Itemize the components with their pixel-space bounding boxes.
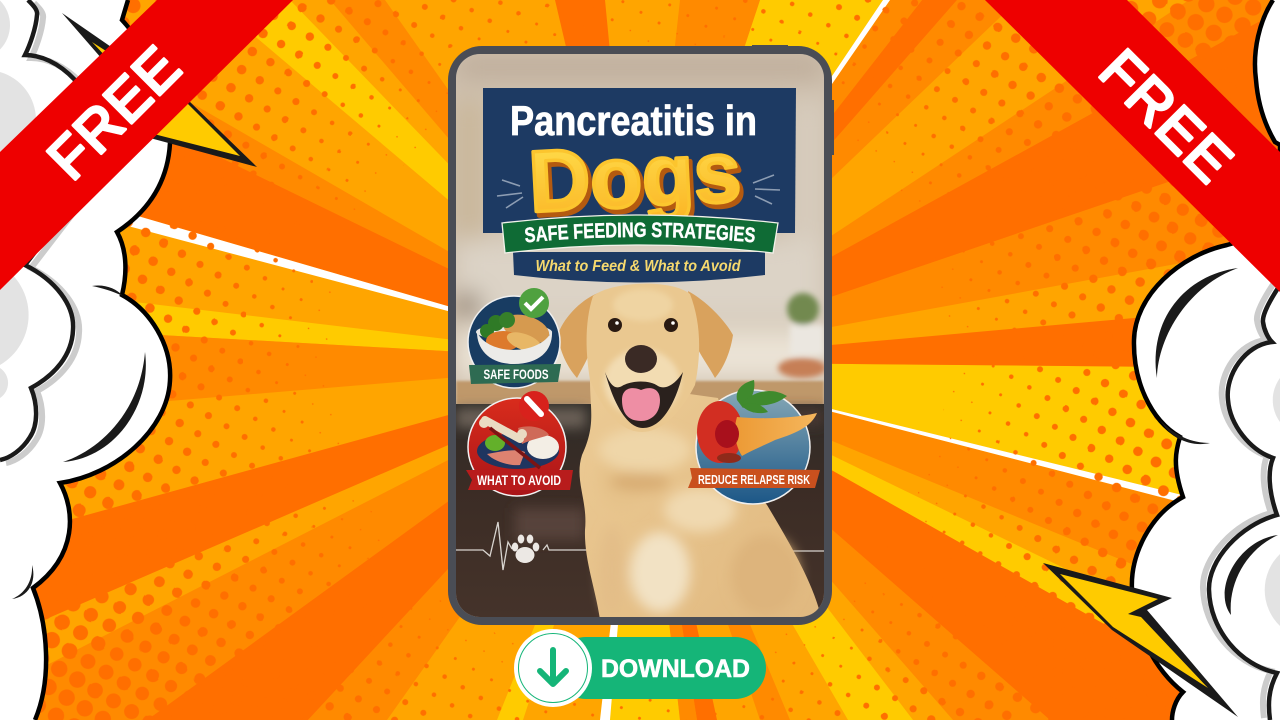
panel: what to avoid	[466, 391, 573, 496]
icon: pancreas	[697, 401, 817, 463]
download button: DOWNLOAD	[601, 655, 750, 683]
panel: safe foods: SAFE FOODS	[484, 367, 548, 382]
title word: Dogs	[531, 148, 744, 218]
title word: Dogs: Dogs	[526, 123, 743, 231]
dog illustration	[558, 284, 822, 620]
ribbon: free right: FREE	[1087, 37, 1245, 195]
icon: no entry badge	[519, 391, 549, 421]
icon: leaves	[737, 380, 787, 413]
ribbon: free left	[0, 0, 293, 290]
ribbon: free right	[985, 0, 1280, 292]
sub banner: What to Feed & What to Avoid	[536, 258, 742, 275]
icon: paw print	[512, 534, 539, 563]
decorative sparks	[497, 175, 780, 208]
right comic cloud	[1132, 0, 1280, 720]
ebook tablet mockup	[448, 45, 834, 625]
title line: Pancreatitis in: Pancreatitis in	[510, 97, 757, 144]
icon: download arrow	[540, 650, 566, 684]
lightning bolt: bottom right	[1043, 563, 1238, 717]
title banner	[483, 88, 796, 282]
icon: green check badge	[519, 288, 549, 318]
green ribbon: SAFE FEEDING STRATEGIES	[525, 222, 755, 242]
panel: safe foods	[468, 288, 561, 388]
sub banner	[513, 252, 765, 282]
download button	[514, 629, 766, 707]
food in bowl	[476, 309, 553, 364]
heartbeat line	[456, 522, 824, 570]
left comic cloud	[0, 0, 171, 720]
green ribbon	[501, 214, 779, 254]
lightning bolt: top left	[62, 13, 257, 167]
plate of fatty foods	[477, 418, 559, 469]
panel: reduce relapse risk	[688, 380, 820, 504]
panel: what to avoid: WHAT TO AVOID	[477, 473, 561, 488]
ribbon: free left: FREE	[35, 34, 193, 192]
kitchen photo background	[456, 54, 826, 617]
title word: Dogs: Dogs	[530, 127, 746, 235]
panel: reduce relapse risk: REDUCE RELAPSE RISK	[698, 472, 810, 487]
